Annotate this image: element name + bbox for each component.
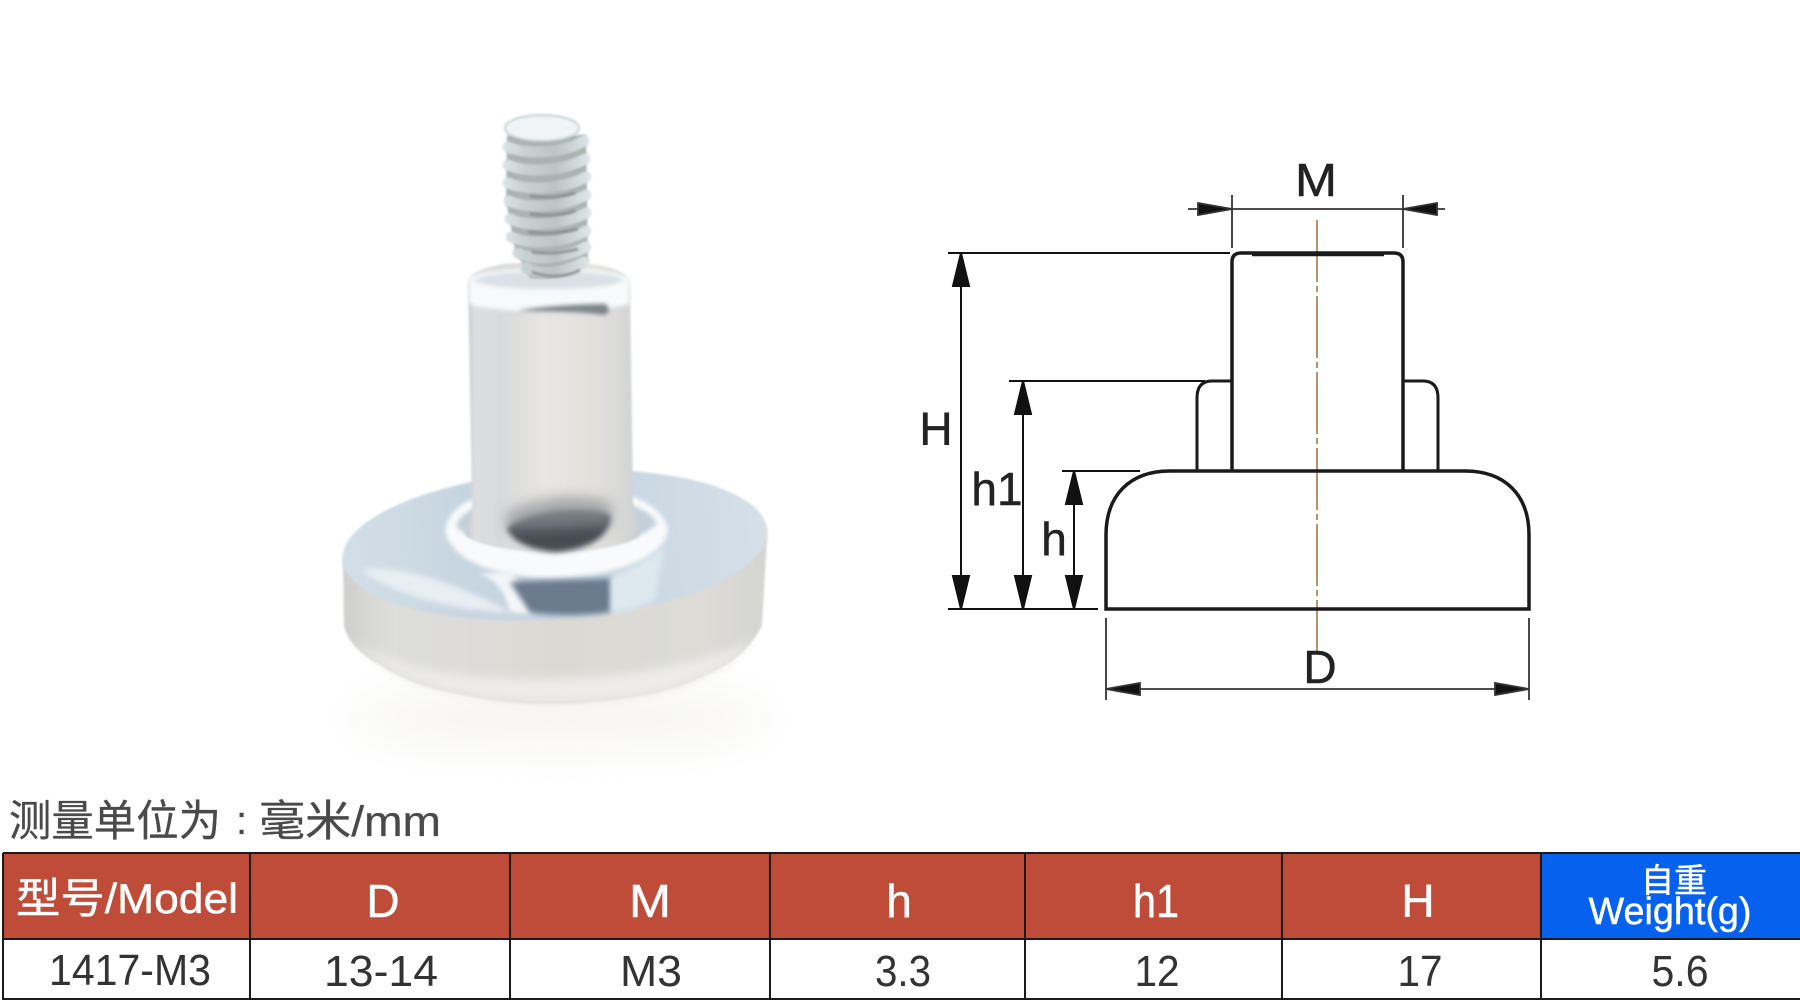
header text [16,862,1752,933]
centre line [1316,220,1318,654]
base reflections [362,492,668,615]
data row text: 1417-M3 [49,946,211,995]
header text: 自重 [1641,862,1707,899]
h dimension [1062,471,1140,609]
header text: Weight(g) [1588,891,1752,933]
cylinder highlight and shoulder [468,268,630,315]
dimension labels: h [1041,513,1067,565]
technical drawing [948,195,1529,700]
header text: h1 [1133,875,1179,927]
part outline [1106,253,1529,609]
dimension labels [919,154,1337,693]
header text: h [886,875,912,927]
M dimension [1188,195,1445,248]
dark base of cylinder [507,510,610,552]
D dimension [1106,618,1529,700]
dimension labels: H [919,403,953,455]
H dimension [948,253,1230,609]
unit note: 测量单位为 [9,798,221,846]
cylinder body [465,262,640,551]
data row text: 5.6 [1652,947,1708,996]
unit note [9,798,441,846]
lighter lower band of base [356,640,752,703]
header text: M [629,875,671,927]
screw thread [505,115,588,279]
header text: D [366,875,400,927]
data row text: 13-14 [324,947,438,996]
product photo: threaded magnet mount [337,115,773,748]
dimension labels: h1 [971,463,1023,515]
unit note: 毫米/mm [259,798,441,846]
data row text: M3 [620,947,682,996]
magnet base side [343,537,767,704]
data row text [49,946,1708,996]
data row text: 3.3 [875,947,931,996]
unit note: : [236,799,247,843]
data row text: 17 [1398,947,1442,996]
dimension labels: M [1295,154,1337,206]
specification table [3,853,1800,1000]
data row text: 12 [1134,947,1180,996]
header cells [3,853,1800,939]
dimension labels: D [1303,641,1337,693]
data row background [3,939,1800,999]
magnet base top face [337,456,773,634]
header text: H [1401,875,1435,927]
table lines [3,853,1800,1000]
header text: 型号/Model [16,875,238,922]
h1 dimension [1009,381,1205,609]
